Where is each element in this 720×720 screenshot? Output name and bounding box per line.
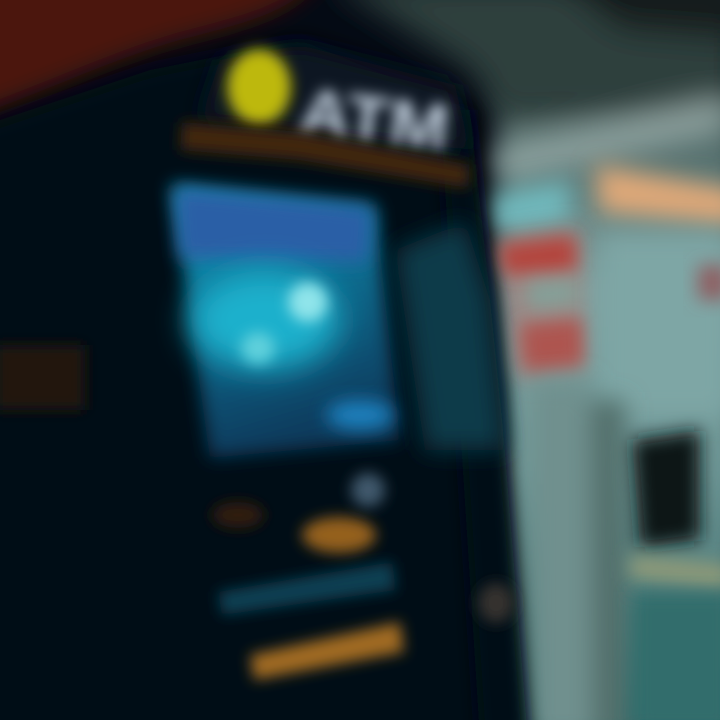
screen: ATM display: [172, 185, 400, 458]
screen: bright area: [190, 270, 340, 370]
floor: yellowish stripe: [630, 555, 720, 590]
wall: red-brown top left: [0, 0, 322, 118]
logo backdrop: [200, 45, 470, 150]
ceiling: dark upper right: [330, 0, 720, 180]
poster: body: [497, 228, 585, 378]
screen: blue header band: [175, 188, 372, 262]
wall: pale teal panel: [600, 235, 720, 415]
poster: pale middle: [525, 278, 578, 310]
kiosk edge: shadow over right side: [440, 110, 528, 720]
side panel: teal card reader hood: [395, 222, 505, 450]
slot: teal strip: [218, 562, 396, 615]
side: grey small light: [478, 583, 514, 623]
column: pale vertical pillar: [530, 380, 630, 720]
poster: cyan top: [490, 180, 570, 235]
logo: white letters: ATM: [295, 73, 453, 165]
screen: lower right button glow: [326, 400, 394, 430]
screen base: [172, 185, 400, 458]
poster: red stripe top: [498, 235, 577, 275]
keypad: pale blue-grey light: [351, 473, 385, 507]
background: station wall on right: [500, 90, 720, 720]
header: ATM logo sign: [200, 45, 470, 165]
keypad: orange button: [302, 517, 376, 553]
screen: highlight dot upper: [288, 282, 328, 322]
cabinet: ATM body: [0, 40, 525, 720]
poster: red and white sign: [490, 180, 585, 378]
door: dark rectangle on wall: [632, 430, 700, 548]
poster: red stripe bottom: [520, 318, 584, 372]
logo: yellow circle: [227, 49, 291, 125]
ledge: brown shelf: [180, 122, 470, 188]
screen: highlight dot lower: [241, 332, 275, 364]
slot: orange strip: [250, 622, 404, 680]
sign: small red mark on wall: [698, 265, 720, 300]
floor: teal ground: [632, 592, 720, 720]
sign: glowing orange light panel: [595, 165, 720, 225]
keypad: small brown light: [212, 502, 264, 528]
left panel: dim brown plate: [0, 345, 85, 410]
